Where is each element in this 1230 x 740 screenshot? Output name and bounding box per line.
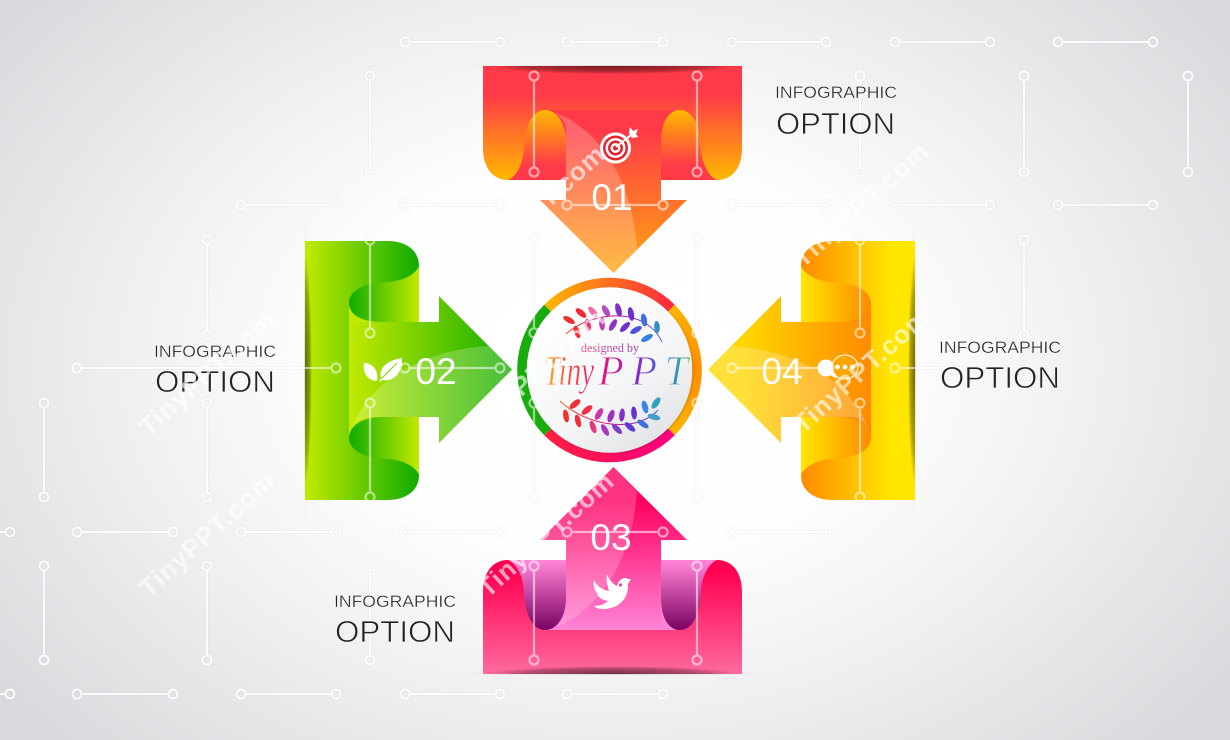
text block: option 02 bbox=[154, 342, 276, 399]
logo text: designed by: designed by bbox=[581, 340, 639, 355]
text block: option 03: INFOGRAPHIC bbox=[334, 592, 456, 611]
watermarks: TinyPPT.com bbox=[472, 465, 620, 603]
ring segment: top bbox=[548, 282, 671, 308]
number 02: 02 bbox=[415, 351, 457, 392]
text block: option 03 bbox=[334, 592, 456, 649]
watermarks: TinyPPT.com bbox=[463, 302, 611, 440]
panel: ribbon arrow 04 (yellow) bbox=[708, 241, 916, 500]
icon: chat bubbles bbox=[818, 355, 858, 379]
inner disc bbox=[527, 288, 692, 452]
center logo badge bbox=[520, 280, 700, 460]
icon: target with arrow bbox=[600, 127, 638, 164]
text block: option 01: OPTION bbox=[776, 106, 895, 141]
logo text: Tiny: Tiny bbox=[544, 349, 594, 395]
number 01: 01 bbox=[591, 177, 633, 218]
laurel: top bbox=[562, 302, 662, 344]
watermarks: TinyPPT.com bbox=[787, 301, 935, 439]
text block: option 03: OPTION bbox=[335, 614, 455, 649]
text block: option 01 bbox=[775, 83, 897, 141]
text block: option 01: INFOGRAPHIC bbox=[775, 83, 897, 102]
number 03: 03 bbox=[590, 517, 632, 558]
panel: ribbon arrow 02 (green) bbox=[304, 241, 512, 500]
logo text: PPT: PPT bbox=[597, 349, 691, 395]
number 04: 04 bbox=[761, 351, 803, 392]
ring segment: left bbox=[522, 308, 548, 432]
watermarks: TinyPPT.com bbox=[133, 465, 281, 603]
panel: ribbon arrow 03 (pink) bbox=[483, 467, 742, 675]
laurel: bottom bbox=[560, 396, 662, 437]
text block: option 02: INFOGRAPHIC bbox=[154, 342, 276, 361]
watermarks: TinyPPT.com bbox=[133, 304, 281, 442]
text block: option 04 bbox=[939, 338, 1061, 395]
text block: option 04: INFOGRAPHIC bbox=[939, 338, 1061, 357]
ring segment: right bbox=[671, 308, 697, 432]
watermarks: TinyPPT.com bbox=[787, 135, 935, 273]
ring segment: bottom bbox=[548, 432, 671, 458]
text block: option 02: OPTION bbox=[155, 364, 275, 399]
watermarks bbox=[133, 135, 935, 603]
text block: option 04: OPTION bbox=[940, 360, 1060, 395]
panel: ribbon arrow 01 (red) bbox=[483, 65, 742, 273]
watermarks: TinyPPT.com bbox=[463, 138, 611, 276]
icon: bird bbox=[594, 574, 631, 609]
icon: leaves bbox=[364, 358, 402, 382]
